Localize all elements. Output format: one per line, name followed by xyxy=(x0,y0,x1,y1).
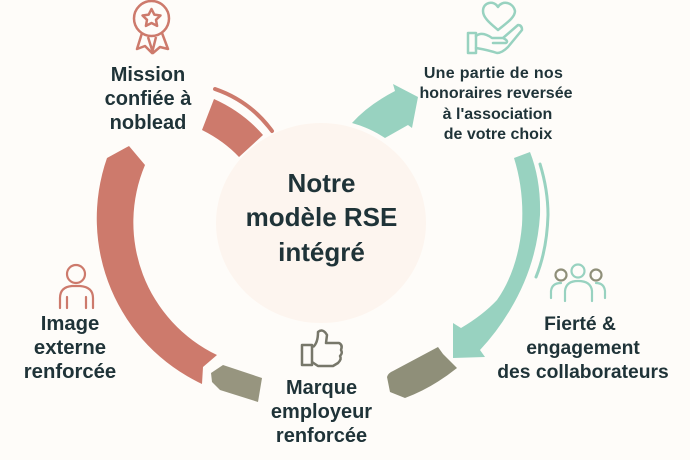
title: Notre xyxy=(288,168,355,198)
label: mission: noblead xyxy=(110,112,186,134)
label: fierté: engagement xyxy=(526,338,640,359)
label: image: externe xyxy=(34,337,106,359)
label: fierté: Fierté & xyxy=(544,314,616,335)
label: image xyxy=(24,313,116,383)
icon: team xyxy=(551,264,605,301)
title: modèle RSE xyxy=(246,202,397,232)
label: don: Une partie de nos xyxy=(424,64,563,82)
icon: heart in hand xyxy=(468,3,522,53)
label: marque: Marque xyxy=(286,377,357,399)
label: fierté xyxy=(497,314,669,383)
title xyxy=(246,168,397,266)
title: intégré xyxy=(278,236,365,266)
label: marque: renforcée xyxy=(276,425,367,447)
label: mission: confiée à xyxy=(105,88,191,110)
label: mission xyxy=(105,64,192,134)
icon: thumbs up xyxy=(302,331,342,366)
label: don: à l'association xyxy=(443,106,552,123)
label: image: Image xyxy=(41,313,99,335)
arc: mission xyxy=(202,89,272,157)
label: don xyxy=(420,64,572,143)
label: fierté: des collaborateurs xyxy=(497,362,669,383)
arc: marque employeur xyxy=(211,365,262,402)
icon: person xyxy=(60,265,93,308)
label: marque: employeur xyxy=(271,401,372,423)
arc: engagement xyxy=(387,347,457,398)
label: image: renforcée xyxy=(24,361,116,383)
arc: image externe xyxy=(97,146,217,384)
label: mission: Mission xyxy=(111,64,185,86)
label: don: de votre choix xyxy=(444,126,552,143)
icon: ribbon xyxy=(134,1,169,53)
center circle xyxy=(216,123,426,323)
arrow: don xyxy=(352,84,418,138)
label: marque xyxy=(271,377,372,447)
label: don: honoraires reversée xyxy=(420,85,572,102)
arrow: fierté xyxy=(453,152,548,358)
